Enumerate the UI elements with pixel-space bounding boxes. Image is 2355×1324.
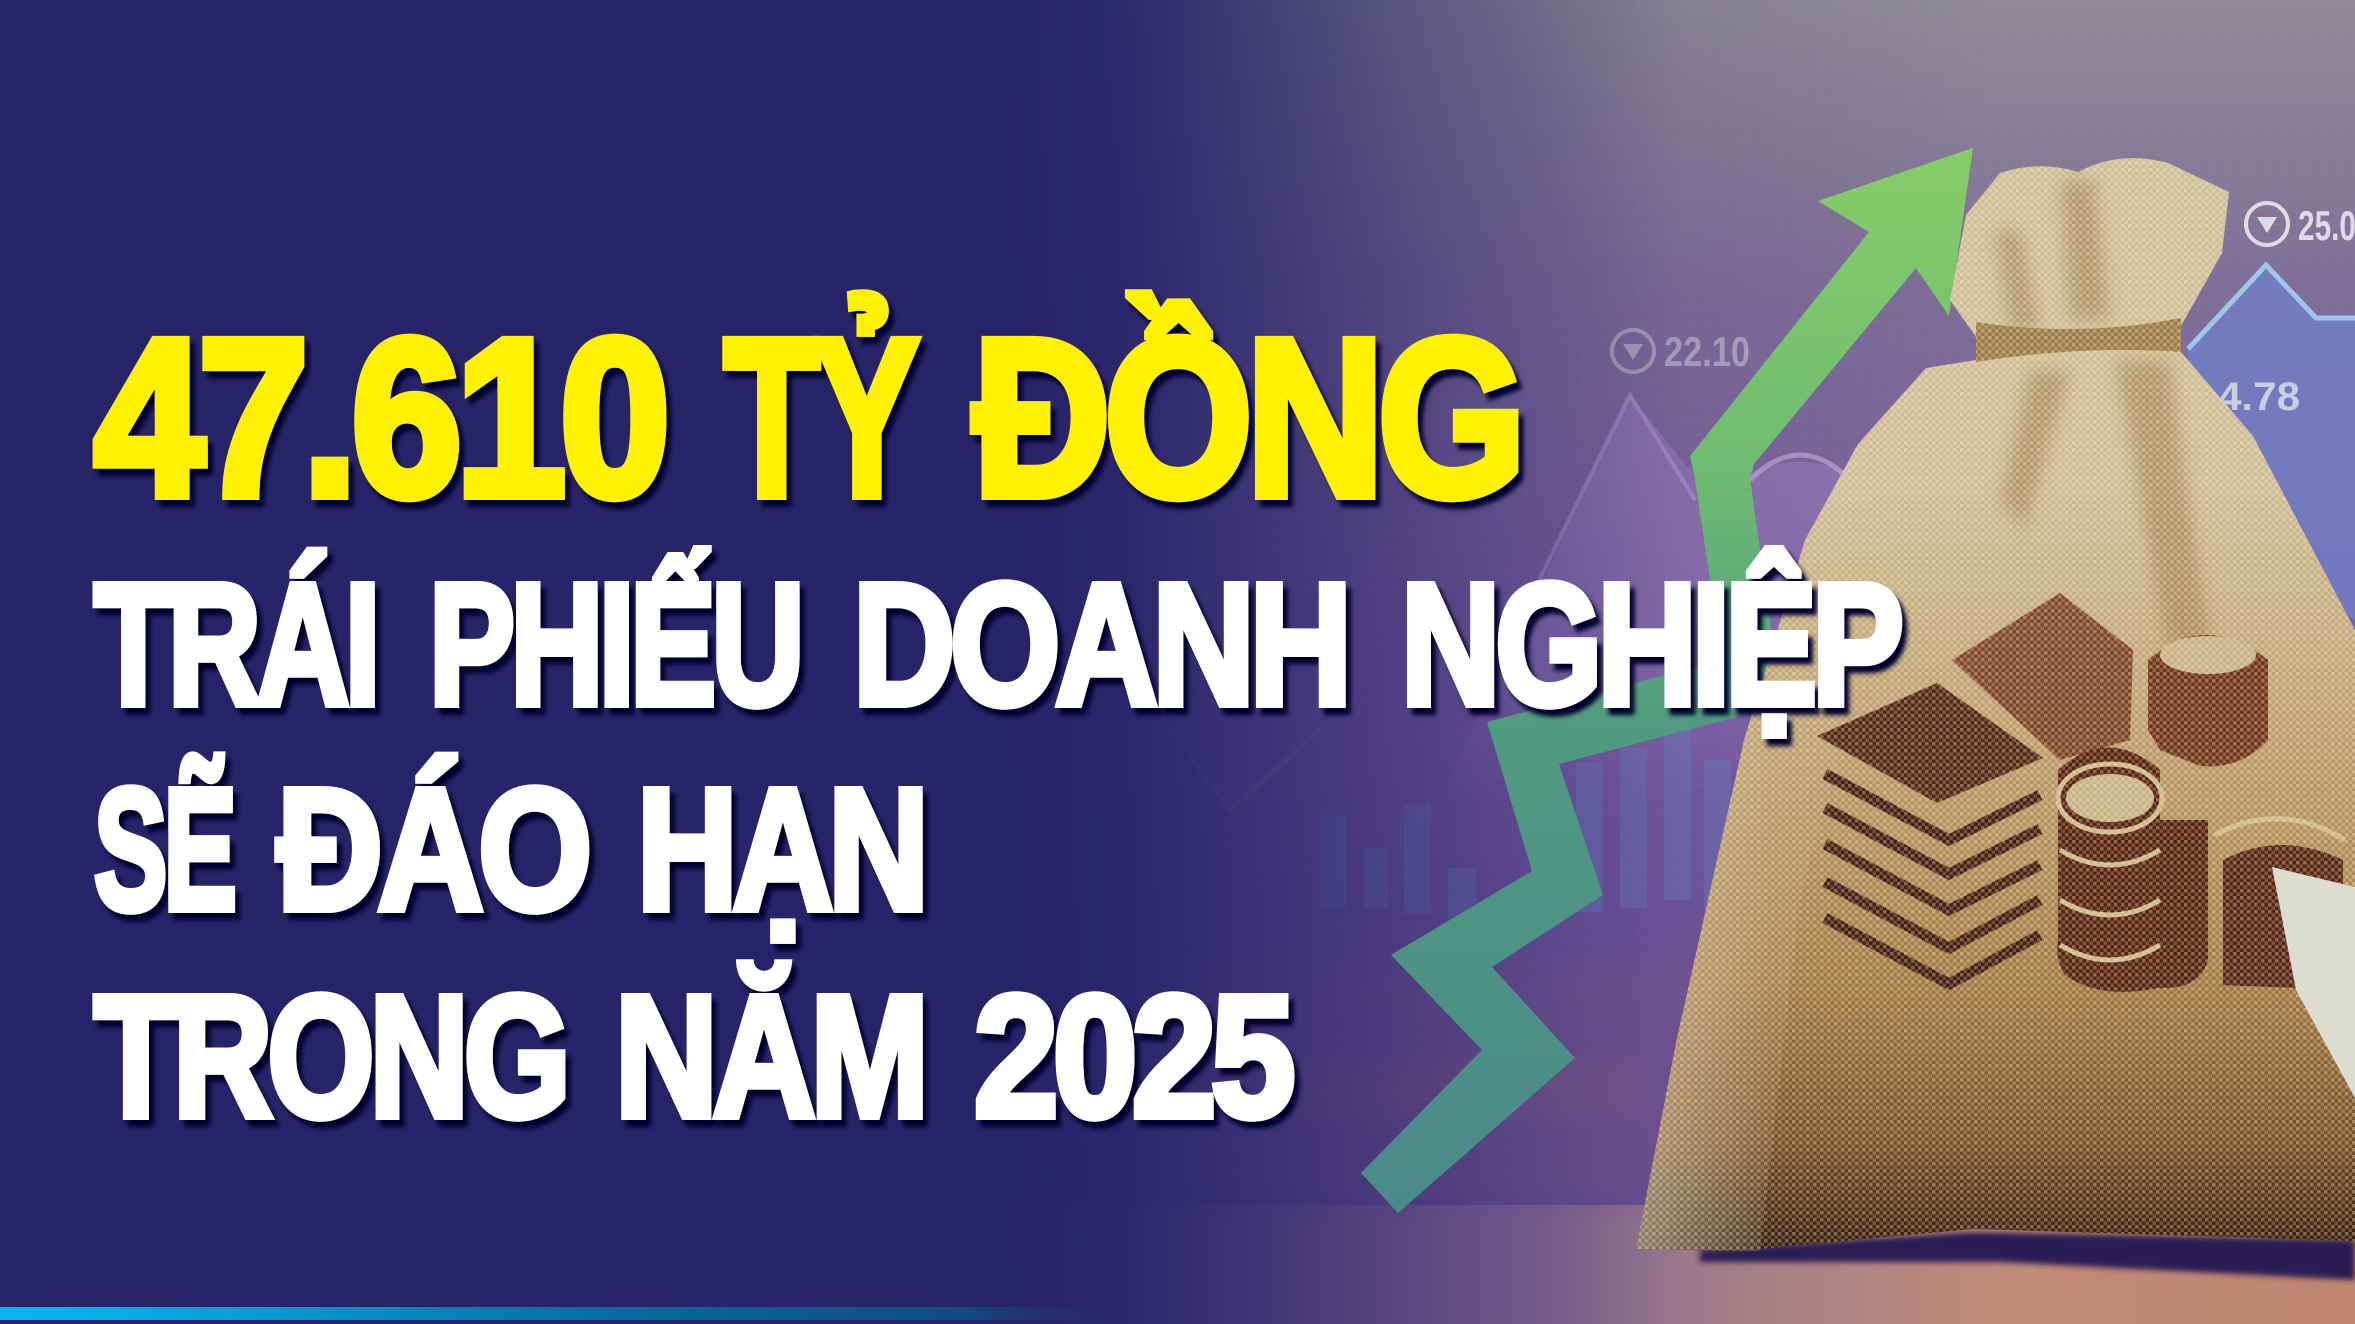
headline line 1: amount (94, 293, 1520, 543)
green growth arrow (1361, 148, 1973, 1213)
headline line 4: 2025 (974, 959, 1292, 1153)
headline line 3: ĐÁO (277, 752, 587, 946)
wooden table (1000, 960, 2355, 1324)
headline (94, 293, 1899, 1153)
headline line 1: amount: ĐỒNG (973, 293, 1520, 543)
chart label: 25.0 (2246, 202, 2355, 249)
headline line 1: amount: TỶ (724, 293, 917, 543)
burlap weave texture (1636, 158, 2355, 1251)
chart label: 4.78: 4.78 (2218, 375, 2300, 419)
bottom accent bar (0, 1307, 1135, 1320)
chart label: 22.10 (1612, 328, 1750, 375)
navy fade over photo (1000, 0, 2000, 1324)
chart label: 22.10: 22.10 (1664, 328, 1750, 375)
headline line 4: TRONG (94, 959, 566, 1153)
headline line 3: HẠN (637, 752, 924, 946)
printed icon: stack of notes (1817, 683, 2043, 984)
headline line 3: SẼ (94, 752, 233, 946)
background chart: purple triangle (1440, 395, 1900, 800)
headline line 4: NĂM (615, 959, 924, 1153)
headline line 2: NGHIỆP (1401, 547, 1899, 741)
headline line 2: TRÁI (94, 547, 376, 741)
bag shadow on table (1700, 1232, 2355, 1280)
folds (1995, 180, 2215, 690)
photo background: chart wall (1000, 0, 2355, 1324)
background chart: bars (1320, 730, 1731, 938)
background chart: faint zigzag (1150, 700, 1320, 810)
white paper corner (2272, 867, 2355, 1098)
left highlight (1636, 444, 1900, 1251)
burlap money bag (1636, 158, 2355, 1280)
background chart: blue peak (2180, 265, 2355, 620)
bag tie (1976, 318, 2181, 362)
headline line 2: DOANH (853, 547, 1347, 741)
headline line 4 (94, 959, 1292, 1153)
printed icon: coin stacks (2057, 635, 2345, 992)
headline line 1: amount: 47.610 (94, 293, 664, 543)
printed icon: rear banknotes (1952, 593, 2133, 760)
headline line 3 (94, 752, 924, 946)
headline line 2 (94, 547, 1899, 741)
bag body and neck (1636, 158, 2355, 1251)
headline line 2: PHIẾU (429, 547, 800, 741)
